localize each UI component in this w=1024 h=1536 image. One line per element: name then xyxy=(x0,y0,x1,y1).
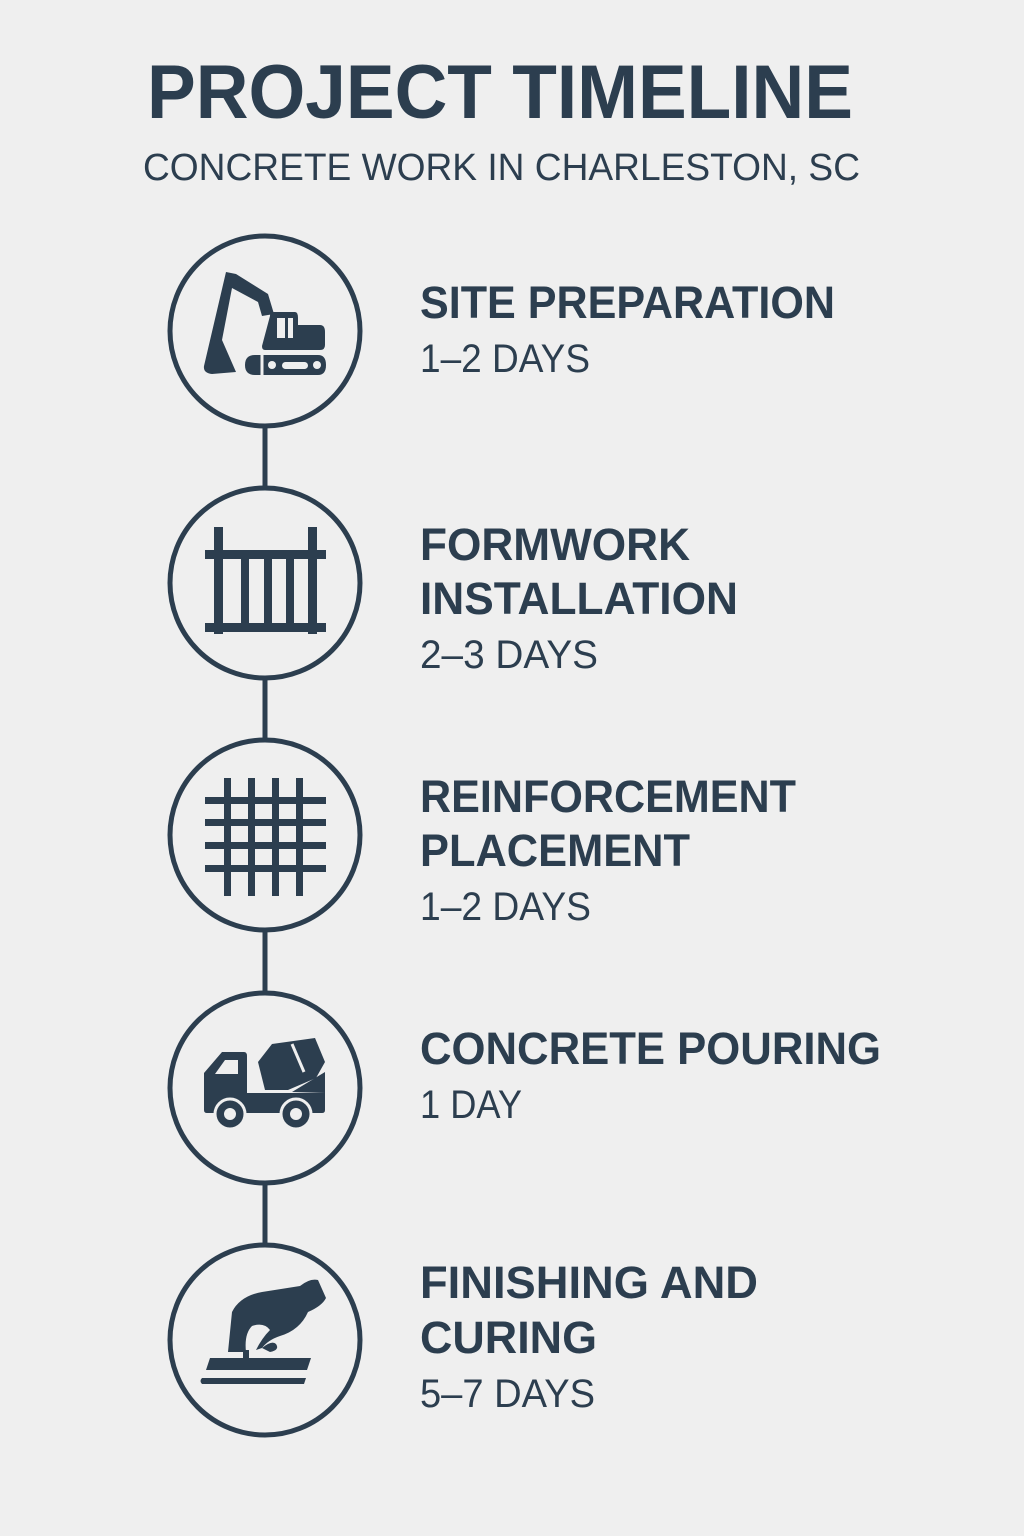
step 3: reinforcement xyxy=(170,740,796,930)
step 3: reinforcement: 1–2 DAYS xyxy=(420,885,591,929)
label: reinforcement placement: REINFORCEMENT xyxy=(420,771,796,822)
step 4: concrete pouring: 1 DAY xyxy=(420,1083,522,1127)
label: site preparation: SITE PREPARATION xyxy=(420,277,835,328)
step 3: reinforcement: PLACEMENT xyxy=(420,825,690,876)
step 2: formwork: INSTALLATION xyxy=(420,573,738,624)
step 2: formwork: 2–3 DAYS xyxy=(420,633,598,677)
icon: rebar grid xyxy=(170,740,360,930)
step 5: finishing and curing: CURING xyxy=(420,1312,597,1363)
step 1: site preparation: 1–2 DAYS xyxy=(420,337,590,381)
label: finishing and curing: FINISHING AND xyxy=(420,1257,758,1308)
timeline connector xyxy=(262,427,268,1244)
step 1: site preparation xyxy=(170,236,835,426)
subtitle: CONCRETE WORK IN CHARLESTON, SC xyxy=(143,147,860,189)
step 5: finishing and curing xyxy=(170,1245,758,1435)
label: concrete pouring: CONCRETE POURING xyxy=(420,1023,881,1074)
step 5: finishing and curing: 5–7 DAYS xyxy=(420,1372,595,1416)
label: formwork installation: FORMWORK xyxy=(420,519,690,570)
icon: mixer truck xyxy=(170,993,360,1183)
title: PROJECT TIMELINE xyxy=(147,50,853,135)
icon: excavator xyxy=(170,236,360,426)
step 2: formwork xyxy=(170,488,738,678)
step 4: concrete pouring xyxy=(170,993,881,1183)
icon: formwork xyxy=(170,488,360,678)
icon: hand with trowel xyxy=(170,1245,360,1435)
